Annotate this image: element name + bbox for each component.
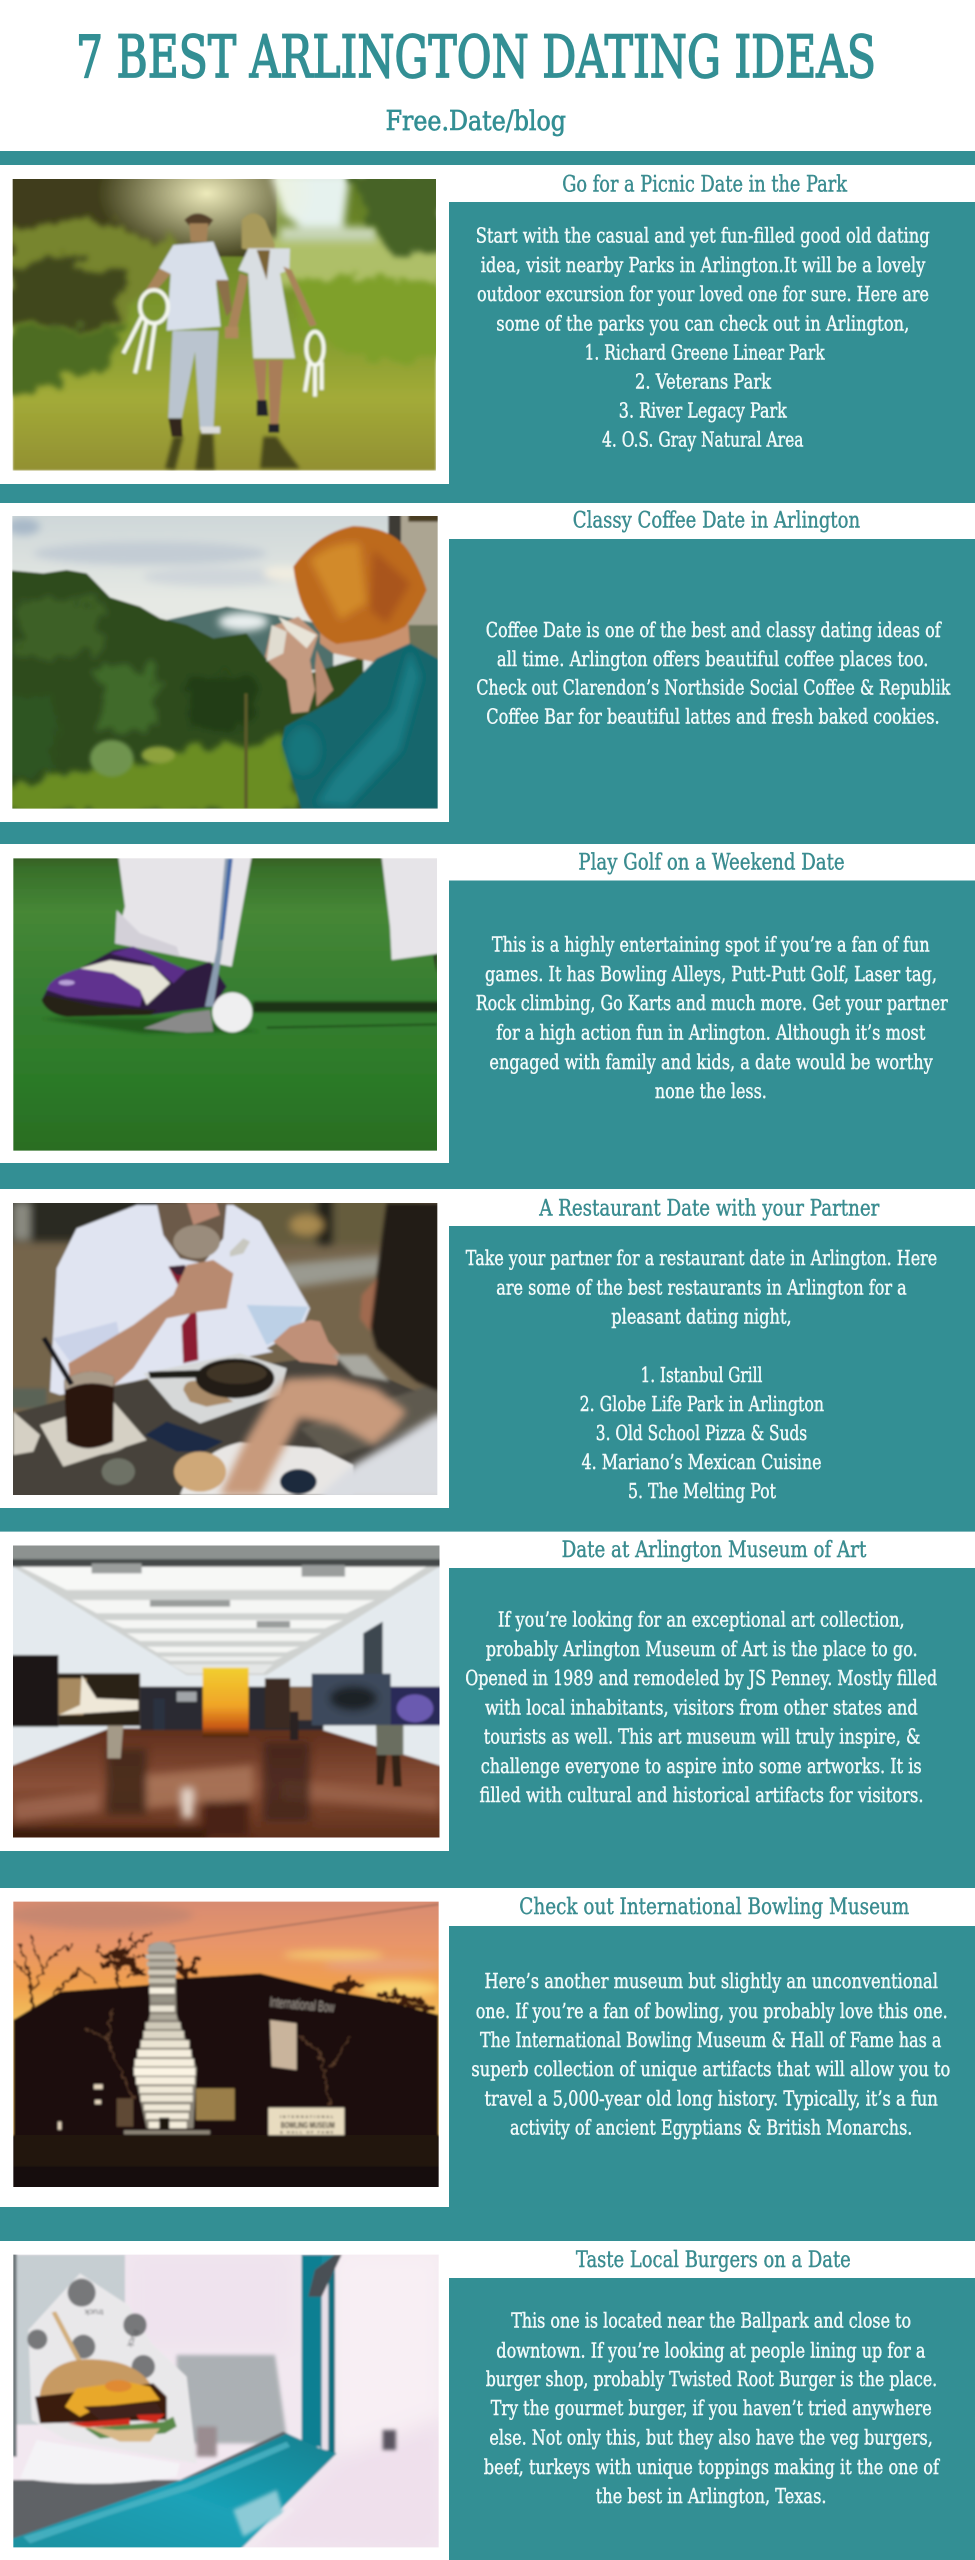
woman	[320, 610, 410, 663]
photo: gallery interior	[13, 1546, 440, 1838]
museum sign	[268, 2108, 344, 2135]
photo: bowling museum at sunset: & HALL OF FAME	[280, 2130, 334, 2135]
body text: 2. Veterans Park	[635, 370, 771, 394]
light pin sculpture	[133, 1942, 197, 2128]
arms	[68, 1260, 233, 1392]
woman	[242, 213, 275, 277]
drink	[57, 1425, 129, 1455]
body text: 4. Mariano’s Mexican Cuisine	[582, 1450, 822, 1474]
photo: golf shoe, putter and ball	[13, 858, 437, 1151]
photo: couple walking in park	[12, 179, 436, 471]
body text: 1. Istanbul Grill	[640, 1363, 762, 1387]
photo: burger on a food truck window: truck	[84, 2308, 103, 2318]
white backing	[0, 1532, 975, 1851]
photo: bearded man eating at outdoor table	[13, 1203, 438, 1495]
dish	[143, 1353, 287, 1423]
burger	[39, 2359, 153, 2403]
heading: Go for a Picnic Date in the Park	[562, 172, 848, 198]
tie	[168, 1265, 198, 1363]
photo: bowling museum at sunset: INTERNATIONAL	[280, 2114, 334, 2119]
subtitle: Free.Date/blog	[386, 106, 566, 137]
floor	[7, 1728, 443, 1842]
photo: woman drinking coffee overlooking forest	[12, 516, 438, 809]
body text	[471, 1969, 950, 2140]
grey canister	[177, 2355, 287, 2443]
white backing	[0, 2241, 975, 2560]
heading: Date at Arlington Museum of Art	[562, 1538, 866, 1563]
panel: burger date	[0, 2241, 975, 2560]
body text	[476, 618, 951, 728]
body text	[466, 1246, 937, 1503]
heading: A Restaurant Date with your Partner	[538, 1196, 880, 1222]
body text: none the less.	[655, 1079, 767, 1103]
window frame	[388, 513, 402, 547]
counter	[7, 2432, 333, 2553]
panel: restaurant date	[0, 1189, 975, 1508]
body text	[476, 932, 948, 1103]
putter	[205, 858, 233, 1007]
door	[363, 1622, 383, 1675]
visitors	[107, 1726, 123, 1758]
panel: bowling museum date	[0, 1888, 975, 2207]
white backing	[0, 503, 975, 822]
wrap paper	[28, 2273, 197, 2463]
dark counter bits	[197, 2427, 396, 2457]
body text	[465, 1608, 937, 1807]
building and trees	[13, 1973, 439, 2135]
right bushes	[293, 277, 447, 360]
table	[7, 1355, 440, 1502]
shirt	[50, 1205, 310, 1395]
ball	[212, 992, 252, 1032]
photo: bowling museum at sunset: BOWLING MUSEUM	[281, 2120, 335, 2130]
beard and face	[157, 1203, 227, 1263]
header block	[76, 24, 876, 137]
body text	[484, 2308, 940, 2508]
body text: pleasant dating night,	[611, 1304, 792, 1328]
panel: picnic date	[0, 127, 975, 484]
shoe	[42, 947, 227, 1017]
left bushes	[7, 217, 173, 333]
panel: museum of art date	[0, 1532, 975, 1851]
wall behind paper	[17, 2255, 125, 2425]
white backing	[0, 1189, 975, 1508]
photo: burger on a food truck window: truck	[125, 2328, 142, 2350]
woman's arm and shirt	[220, 1377, 447, 1502]
bare tree branches	[15, 1933, 433, 2018]
pants	[115, 857, 252, 967]
photo: bowling museum at sunset	[13, 1902, 439, 2187]
body text: 3. Old School Pizza & Suds	[596, 1421, 807, 1445]
body text: 5. The Melting Pot	[628, 1479, 777, 1503]
body text	[476, 224, 930, 452]
body text: the best in Arlington, Texas.	[596, 2484, 826, 2508]
white backing	[0, 1888, 975, 2207]
body text: 2. Globe Life Park in Arlington	[580, 1392, 824, 1416]
grass shadow	[7, 327, 120, 400]
windows	[270, 2020, 297, 2070]
heading: Play Golf on a Weekend Date	[578, 850, 845, 876]
ceiling	[13, 1567, 439, 1675]
far wall crowd	[140, 1687, 323, 1730]
heading: Classy Coffee Date in Arlington	[573, 508, 860, 534]
body text: 4. O.S. Gray Natural Area	[602, 428, 804, 452]
man	[184, 213, 213, 227]
heading: Taste Local Burgers on a Date	[576, 2248, 851, 2273]
dream catchers	[123, 290, 324, 397]
diagonal sill	[7, 2433, 337, 2553]
panel: coffee date	[0, 503, 975, 822]
paintings	[7, 1655, 58, 1727]
teal window frame	[293, 2255, 335, 2457]
paper base	[20, 2440, 180, 2484]
white backing	[0, 165, 975, 484]
panel: golf date	[0, 844, 975, 1163]
body text: 1. Richard Greene Linear Park	[585, 340, 825, 364]
body text: 3. River Legacy Park	[619, 398, 787, 422]
plate and food	[180, 1442, 353, 1495]
white backing	[0, 844, 975, 1163]
building lettering: International Bow	[269, 1995, 335, 2016]
heading: Check out International Bowling Museum	[519, 1895, 909, 1920]
photo: burger on a food truck window	[13, 2254, 439, 2548]
hair on the right	[360, 1203, 440, 1392]
